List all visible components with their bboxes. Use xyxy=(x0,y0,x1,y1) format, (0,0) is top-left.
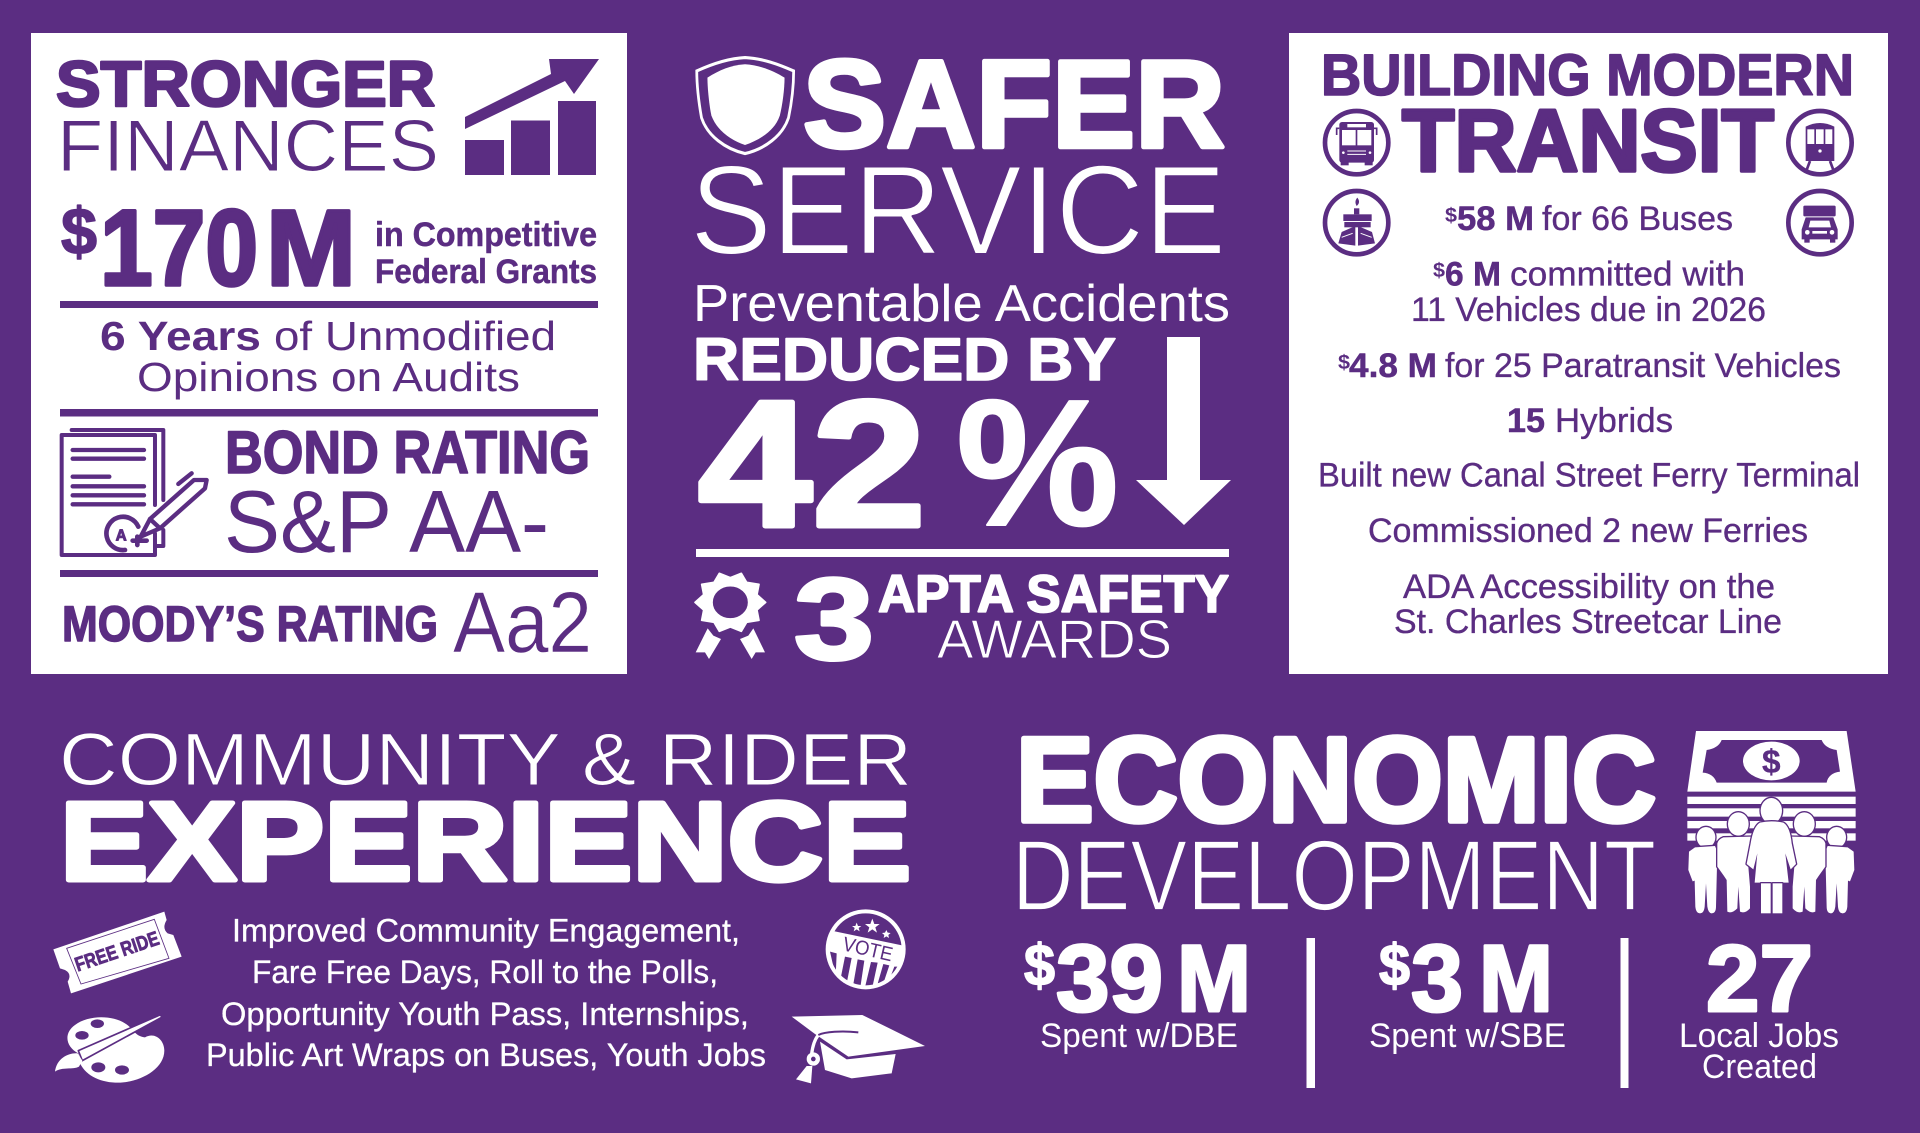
list: buses: 58 M xyxy=(1457,200,1534,238)
text: community programs: Improved Community Engagement, xyxy=(232,912,740,948)
icon: streetcar xyxy=(1788,111,1852,174)
text: bond rating s&p: S&P AA- xyxy=(224,472,549,571)
list: vehicles due in 2026: 6 M xyxy=(1445,256,1501,294)
heading: building modern transit xyxy=(1321,43,1854,190)
stat: 27 local jobs created: 27 xyxy=(1706,926,1813,1032)
icon: shield xyxy=(697,58,794,154)
text: community programs: Fare Free Days, Roll to the Polls, xyxy=(252,954,718,990)
text: six years of unmodified opinions xyxy=(100,313,556,400)
text: three apta safety awards: 3 xyxy=(794,554,874,684)
list: vehicles due in 2026: committed with xyxy=(1510,256,1745,294)
stat: 3 million with sbe: Spent w/SBE xyxy=(1369,1017,1566,1055)
text: three apta safety awards: AWARDS xyxy=(937,608,1172,670)
heading: safer service xyxy=(690,36,1226,281)
heading: stronger finances xyxy=(56,48,439,187)
icon: free ride ticket: FREE RIDE xyxy=(72,928,162,976)
icon: paint palette xyxy=(55,1015,164,1083)
list: buses: $ xyxy=(1445,205,1457,227)
stat: 39 million with dbe xyxy=(1024,926,1251,1055)
text: moodys rating xyxy=(62,575,592,671)
icon: bus xyxy=(1325,111,1388,174)
stat: 3 million with sbe: M xyxy=(1479,926,1553,1032)
stat: 3 million with sbe: 3 xyxy=(1411,926,1463,1032)
list: ferry terminal: Built new Canal Street Ferry Terminal xyxy=(1318,456,1860,494)
list: buses xyxy=(1445,200,1733,238)
list: hybrids: 15 xyxy=(1507,402,1545,440)
stat: 3 million with sbe xyxy=(1369,926,1566,1055)
stat: 39 million with dbe: M xyxy=(1177,926,1251,1032)
text: moodys rating: MOODY’S RATING xyxy=(62,596,438,652)
text: in competitive federal grants xyxy=(375,216,597,291)
panel: safer service xyxy=(690,36,1231,684)
list: hybrids: Hybrids xyxy=(1555,402,1673,440)
stat: 27 local jobs created: Local Jobs xyxy=(1679,1017,1839,1055)
stat: 42 percent: % xyxy=(956,363,1119,564)
stat: 39 million with dbe: 39 xyxy=(1056,926,1163,1032)
list: buses: for 66 Buses xyxy=(1542,200,1733,238)
icon: rated document with pen xyxy=(62,430,207,555)
stat: 39 million with dbe: Spent w/DBE xyxy=(1040,1017,1238,1055)
heading: safer service: SERVICE xyxy=(690,139,1226,281)
icon: rising bar chart with arrow xyxy=(465,59,599,175)
stat: 170 million dollars: $ xyxy=(61,194,97,268)
icon: rated document with pen: A xyxy=(116,528,127,545)
list: vehicles due in 2026: 11 Vehicles due in 2026 xyxy=(1411,291,1766,329)
icon: paratransit van xyxy=(1788,191,1852,254)
text: preventable accidents reduced by: Preventable Accidents xyxy=(693,275,1230,333)
heading: building modern transit: TRANSIT xyxy=(1402,91,1774,190)
heading: community and rider experience xyxy=(59,718,912,904)
heading: community and rider experience: COMMUNITY & RIDER xyxy=(59,718,912,801)
stat: 27 local jobs created: Created xyxy=(1702,1048,1817,1086)
icon: graduation cap xyxy=(792,1015,925,1083)
icon: free ride ticket xyxy=(53,912,182,993)
icon: award ribbon xyxy=(695,573,766,659)
list: hybrids xyxy=(1507,402,1673,440)
text: in competitive federal grants: Federal Grants xyxy=(375,253,597,291)
text: in competitive federal grants: in Competitive xyxy=(375,216,597,254)
list: paratransit vehicles: for 25 Paratransit Vehicles xyxy=(1445,347,1841,385)
list: ada accessibility: ADA Accessibility on the xyxy=(1403,568,1775,606)
list: vehicles due in 2026: $ xyxy=(1433,260,1445,282)
text: community programs xyxy=(206,912,766,1073)
icon: vote button: VOTE xyxy=(841,933,895,966)
stat: 170 million dollars xyxy=(61,187,356,308)
icon: vote button xyxy=(825,909,908,989)
icon: ferry xyxy=(1325,191,1388,254)
text: three apta safety awards xyxy=(794,554,1229,684)
stat: 39 million with dbe: $ xyxy=(1024,933,1055,998)
heading: stronger finances: STRONGER xyxy=(56,48,435,120)
text: preventable accidents reduced by: REDUCED BY xyxy=(693,326,1116,393)
list: ada accessibility: St. Charles Streetcar Line xyxy=(1394,603,1782,641)
icon: money and people: $ xyxy=(1762,744,1781,781)
list: vehicles due in 2026 xyxy=(1411,256,1766,329)
panel: building modern transit xyxy=(1289,33,1888,674)
text: three apta safety awards: APTA SAFETY xyxy=(878,565,1229,624)
heading: community and rider experience: EXPERIENCE xyxy=(60,779,911,904)
heading: building modern transit: BUILDING MODERN xyxy=(1321,43,1854,108)
panel: stronger finances xyxy=(31,33,627,674)
heading: safer service: SAFER xyxy=(803,36,1225,174)
list: new ferries: Commissioned 2 new Ferries xyxy=(1368,512,1808,550)
text: community programs: Opportunity Youth Pass, Internships, xyxy=(221,996,749,1032)
heading: economic development: DEVELOPMENT xyxy=(1012,820,1656,932)
list: paratransit vehicles: 4.8 M xyxy=(1349,347,1437,385)
heading: economic development xyxy=(1012,713,1656,932)
text: preventable accidents reduced by xyxy=(693,275,1230,393)
stat: 170 million dollars: 170 xyxy=(100,187,258,308)
panel: community and rider experience xyxy=(53,718,925,1083)
text: moodys rating: Aa2 xyxy=(453,575,592,671)
stat: 170 million dollars: M xyxy=(266,187,356,308)
text: bond rating s&p xyxy=(224,419,590,571)
text: six years of unmodified opinions: Opinions on Audits xyxy=(137,354,520,400)
list: ada accessibility xyxy=(1394,568,1782,641)
text: community programs: Public Art Wraps on Buses, Youth Jobs xyxy=(206,1037,766,1073)
text: bond rating s&p: BOND RATING xyxy=(225,419,590,486)
arrow: down xyxy=(1136,337,1231,525)
panel: economic development xyxy=(1012,713,1856,1088)
text: six years of unmodified opinions: of Unmodified xyxy=(274,313,556,359)
heading: economic development: ECONOMIC xyxy=(1016,713,1656,847)
list: paratransit vehicles: $ xyxy=(1338,352,1350,374)
stat: 42 percent xyxy=(698,363,1119,565)
heading: stronger finances: FINANCES xyxy=(57,106,439,187)
stat: 3 million with sbe: $ xyxy=(1379,933,1410,998)
stat: 42 percent: 42 xyxy=(698,364,926,565)
stat: 27 local jobs created xyxy=(1679,926,1839,1086)
text: six years of unmodified opinions: 6 Years xyxy=(100,313,261,359)
icon: money and people xyxy=(1687,731,1856,913)
